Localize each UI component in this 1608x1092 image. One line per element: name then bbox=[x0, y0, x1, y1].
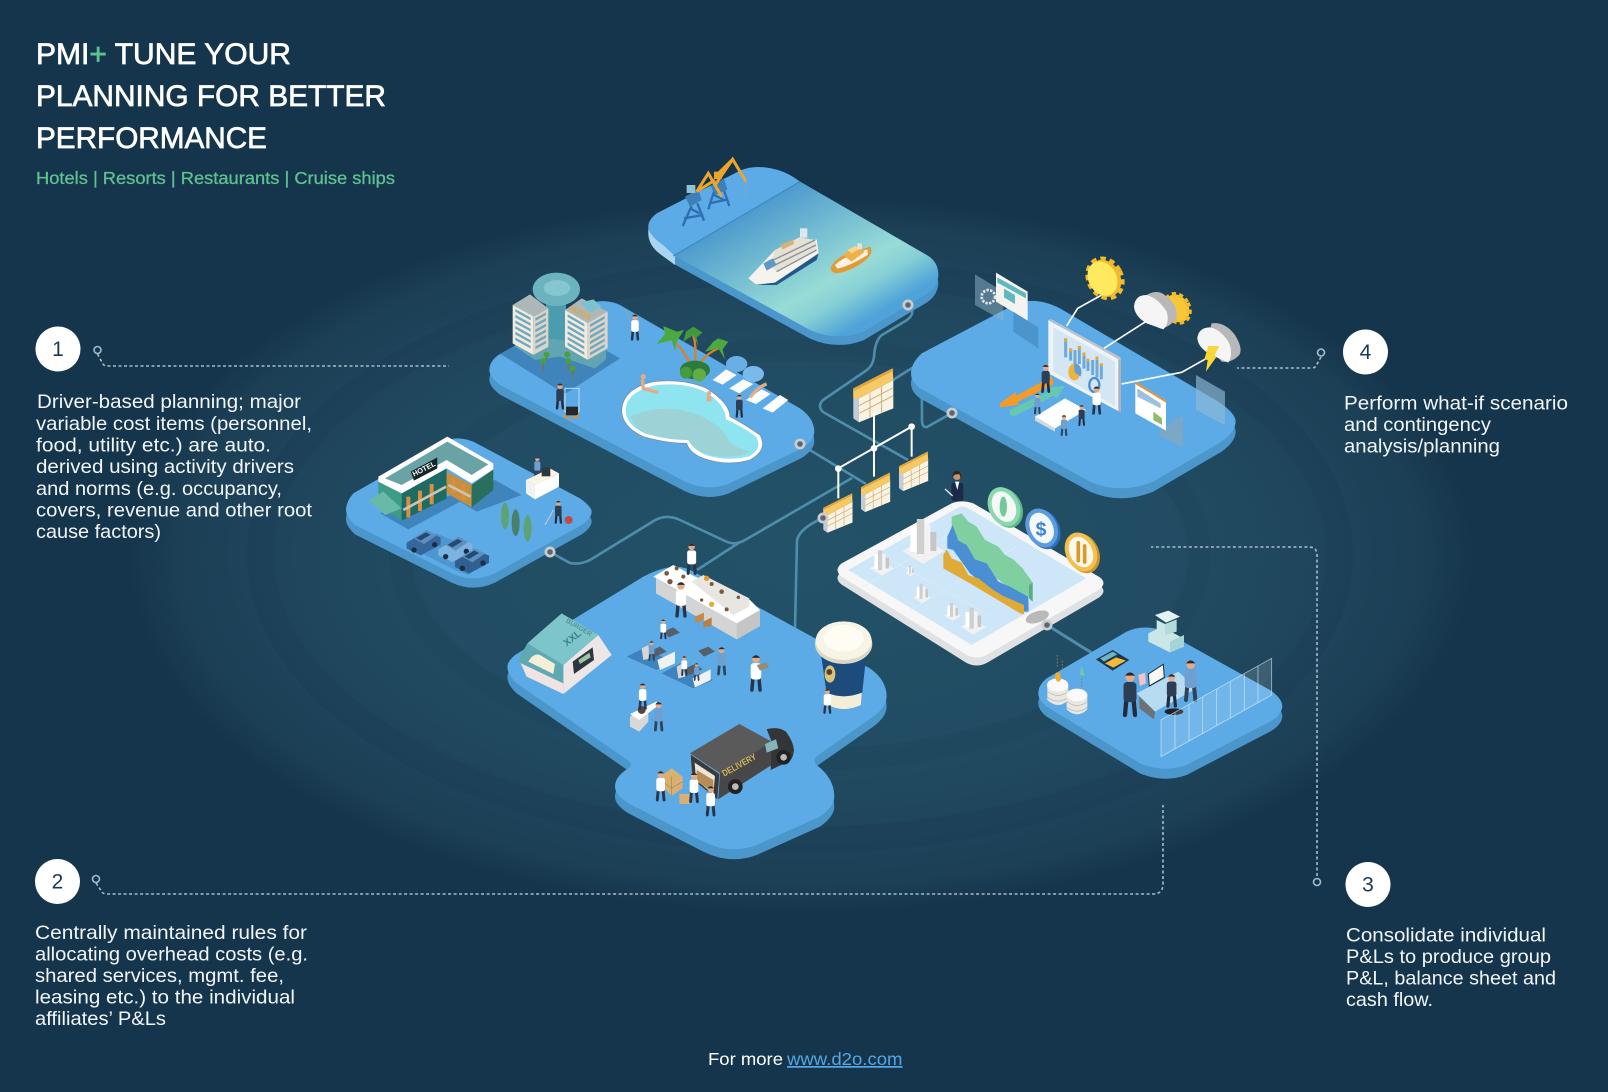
callout 4 text bbox=[1344, 392, 1568, 458]
icon: porter with luggage cart bbox=[556, 384, 579, 419]
footer link: www.d2o.com bbox=[786, 1049, 902, 1069]
icon: burger kiosk bbox=[517, 613, 612, 694]
icon: reception desk bbox=[526, 457, 559, 499]
callout 1 text: Driver-based planning; major bbox=[37, 391, 302, 413]
icon: cooking station bbox=[630, 684, 663, 732]
connector lines between platforms bbox=[550, 306, 1092, 653]
icon: hotel tower: HOTEL bbox=[568, 305, 593, 323]
icon: sun loungers and umbrellas bbox=[713, 356, 788, 413]
icon: guests at pool bbox=[641, 374, 743, 417]
icon: dining tables and guests bbox=[627, 619, 726, 688]
icon: waiter with tray bbox=[751, 655, 769, 690]
title: PERFORMANCE bbox=[36, 122, 267, 155]
icon: trees bbox=[501, 503, 532, 542]
org hierarchy of P&L tables bbox=[823, 368, 928, 533]
title bbox=[36, 38, 386, 155]
callout 4 text: analysis/planning bbox=[1344, 436, 1500, 458]
panel: restaurant platform bbox=[507, 544, 887, 859]
callout 1 text bbox=[36, 391, 313, 543]
icon: people coin bbox=[981, 482, 1029, 533]
icon: meeting table and team bbox=[1034, 365, 1101, 435]
icon: ferry boat bbox=[831, 243, 871, 273]
callout 2 text: shared services, mgmt. fee, bbox=[35, 965, 284, 987]
callout 2 text: allocating overhead costs (e.g. bbox=[35, 944, 308, 966]
callout 3 text bbox=[1346, 924, 1556, 1011]
icon: swimming pool bbox=[622, 381, 763, 463]
callout 1 text: variable cost items (personnel, bbox=[36, 413, 312, 435]
icon: floating dashboard panels bbox=[975, 273, 1225, 425]
panel: weather scenario platform bbox=[911, 254, 1241, 498]
icon: data coin stacks bbox=[1047, 655, 1087, 714]
callout 1 text: and norms (e.g. occupancy, bbox=[36, 478, 282, 500]
callout 1 text: covers, revenue and other root bbox=[36, 500, 313, 522]
dashed callout leaders bbox=[92, 346, 1324, 894]
icon: delivery truck bbox=[690, 724, 794, 799]
panel: group finance office platform bbox=[1038, 611, 1282, 779]
icon: palm trees bbox=[657, 326, 728, 382]
callout 4 badge bbox=[1343, 330, 1388, 374]
callout 2 badge bbox=[35, 859, 80, 904]
panel: motel platform bbox=[346, 437, 592, 588]
icon: storm cloud bbox=[1197, 323, 1241, 372]
callout 2 text: affiliates’ P&Ls bbox=[35, 1008, 166, 1030]
icon: burger kiosk: XXL bbox=[562, 628, 584, 649]
icon: white city blocks bbox=[870, 519, 986, 635]
callout 3 badge: 3 bbox=[1362, 874, 1374, 896]
panel: tablet with consolidated charts bbox=[837, 471, 1106, 665]
title: PMI+ TUNE YOUR bbox=[36, 38, 291, 71]
icon: hotel tower bbox=[513, 273, 608, 377]
icon: dollar coin bbox=[1019, 503, 1067, 555]
callout 2 badge: 2 bbox=[52, 870, 63, 894]
icon: motel building: HOTEL bbox=[411, 459, 437, 478]
icon: cruise ship bbox=[748, 228, 819, 285]
footer link bbox=[708, 1049, 902, 1069]
subtitle: Hotels | Resorts | Restaurants | Cruise ships bbox=[36, 168, 395, 188]
icon: dollar coin: $ bbox=[1036, 519, 1047, 540]
callout 1 badge bbox=[36, 326, 80, 372]
icon: cloud with sun bbox=[1134, 290, 1194, 329]
callout 3 text: P&L, balance sheet and bbox=[1346, 968, 1556, 990]
icon: delivery truck: DELIVERY bbox=[720, 752, 758, 778]
icon: cleaner with vacuum bbox=[545, 501, 573, 525]
callout 4 text: Perform what-if scenario bbox=[1344, 392, 1568, 414]
icon: burger kiosk: BURGER bbox=[564, 618, 593, 638]
icon: sun bbox=[1081, 254, 1128, 303]
callout 2 text: leasing etc.) to the individual bbox=[35, 986, 295, 1008]
icon: orange and teal arrows bbox=[1000, 377, 1065, 416]
icon: coffee cup bbox=[815, 621, 872, 713]
icon: buffet counter with chefs bbox=[653, 544, 760, 639]
icon: paper stacks bbox=[1148, 611, 1184, 652]
callout 4 text: and contingency bbox=[1344, 414, 1491, 436]
icon: port cranes bbox=[683, 159, 746, 226]
icon: golfer bbox=[625, 309, 639, 339]
icon: parked cars bbox=[405, 530, 490, 575]
panel: cruise ship port platform bbox=[648, 159, 943, 350]
callout 3 badge bbox=[1346, 862, 1390, 907]
callout 3 text: P&Ls to produce group bbox=[1346, 946, 1551, 968]
callout 1 text: cause factors) bbox=[36, 521, 161, 543]
icon: report sheets bbox=[1135, 382, 1183, 447]
panel: resort platform bbox=[489, 273, 814, 497]
icon: restaurant coin bbox=[1058, 527, 1106, 579]
callout 1 text: food, utility etc.) are auto. bbox=[36, 434, 271, 456]
icon: glass wall bbox=[1161, 658, 1272, 757]
icon: businesswoman on tablet bbox=[945, 471, 963, 501]
callout 3 text: cash flow. bbox=[1346, 989, 1433, 1011]
callout 1 text: derived using activity drivers bbox=[36, 456, 294, 478]
callout 1 badge: 1 bbox=[52, 338, 64, 361]
icon: motel building bbox=[368, 437, 493, 521]
area chart: layered steps bbox=[943, 513, 1033, 614]
callout 3 text: Consolidate individual bbox=[1346, 924, 1546, 946]
icon: scenario link lines bbox=[1067, 295, 1207, 384]
icon: line sockets bbox=[544, 300, 1052, 630]
title: PLANNING FOR BETTER bbox=[36, 80, 386, 113]
callout 2 text bbox=[35, 922, 308, 1030]
icon: team at desk bbox=[1124, 660, 1197, 719]
callout 2 text: Centrally maintained rules for bbox=[35, 922, 308, 944]
icon: cardboard boxes and workers bbox=[656, 768, 715, 815]
icon: calculator bbox=[1096, 650, 1129, 671]
callout 4 badge: 4 bbox=[1360, 341, 1372, 364]
icon: presentation screen with charts bbox=[1048, 319, 1121, 412]
footer link: For more bbox=[708, 1049, 783, 1069]
